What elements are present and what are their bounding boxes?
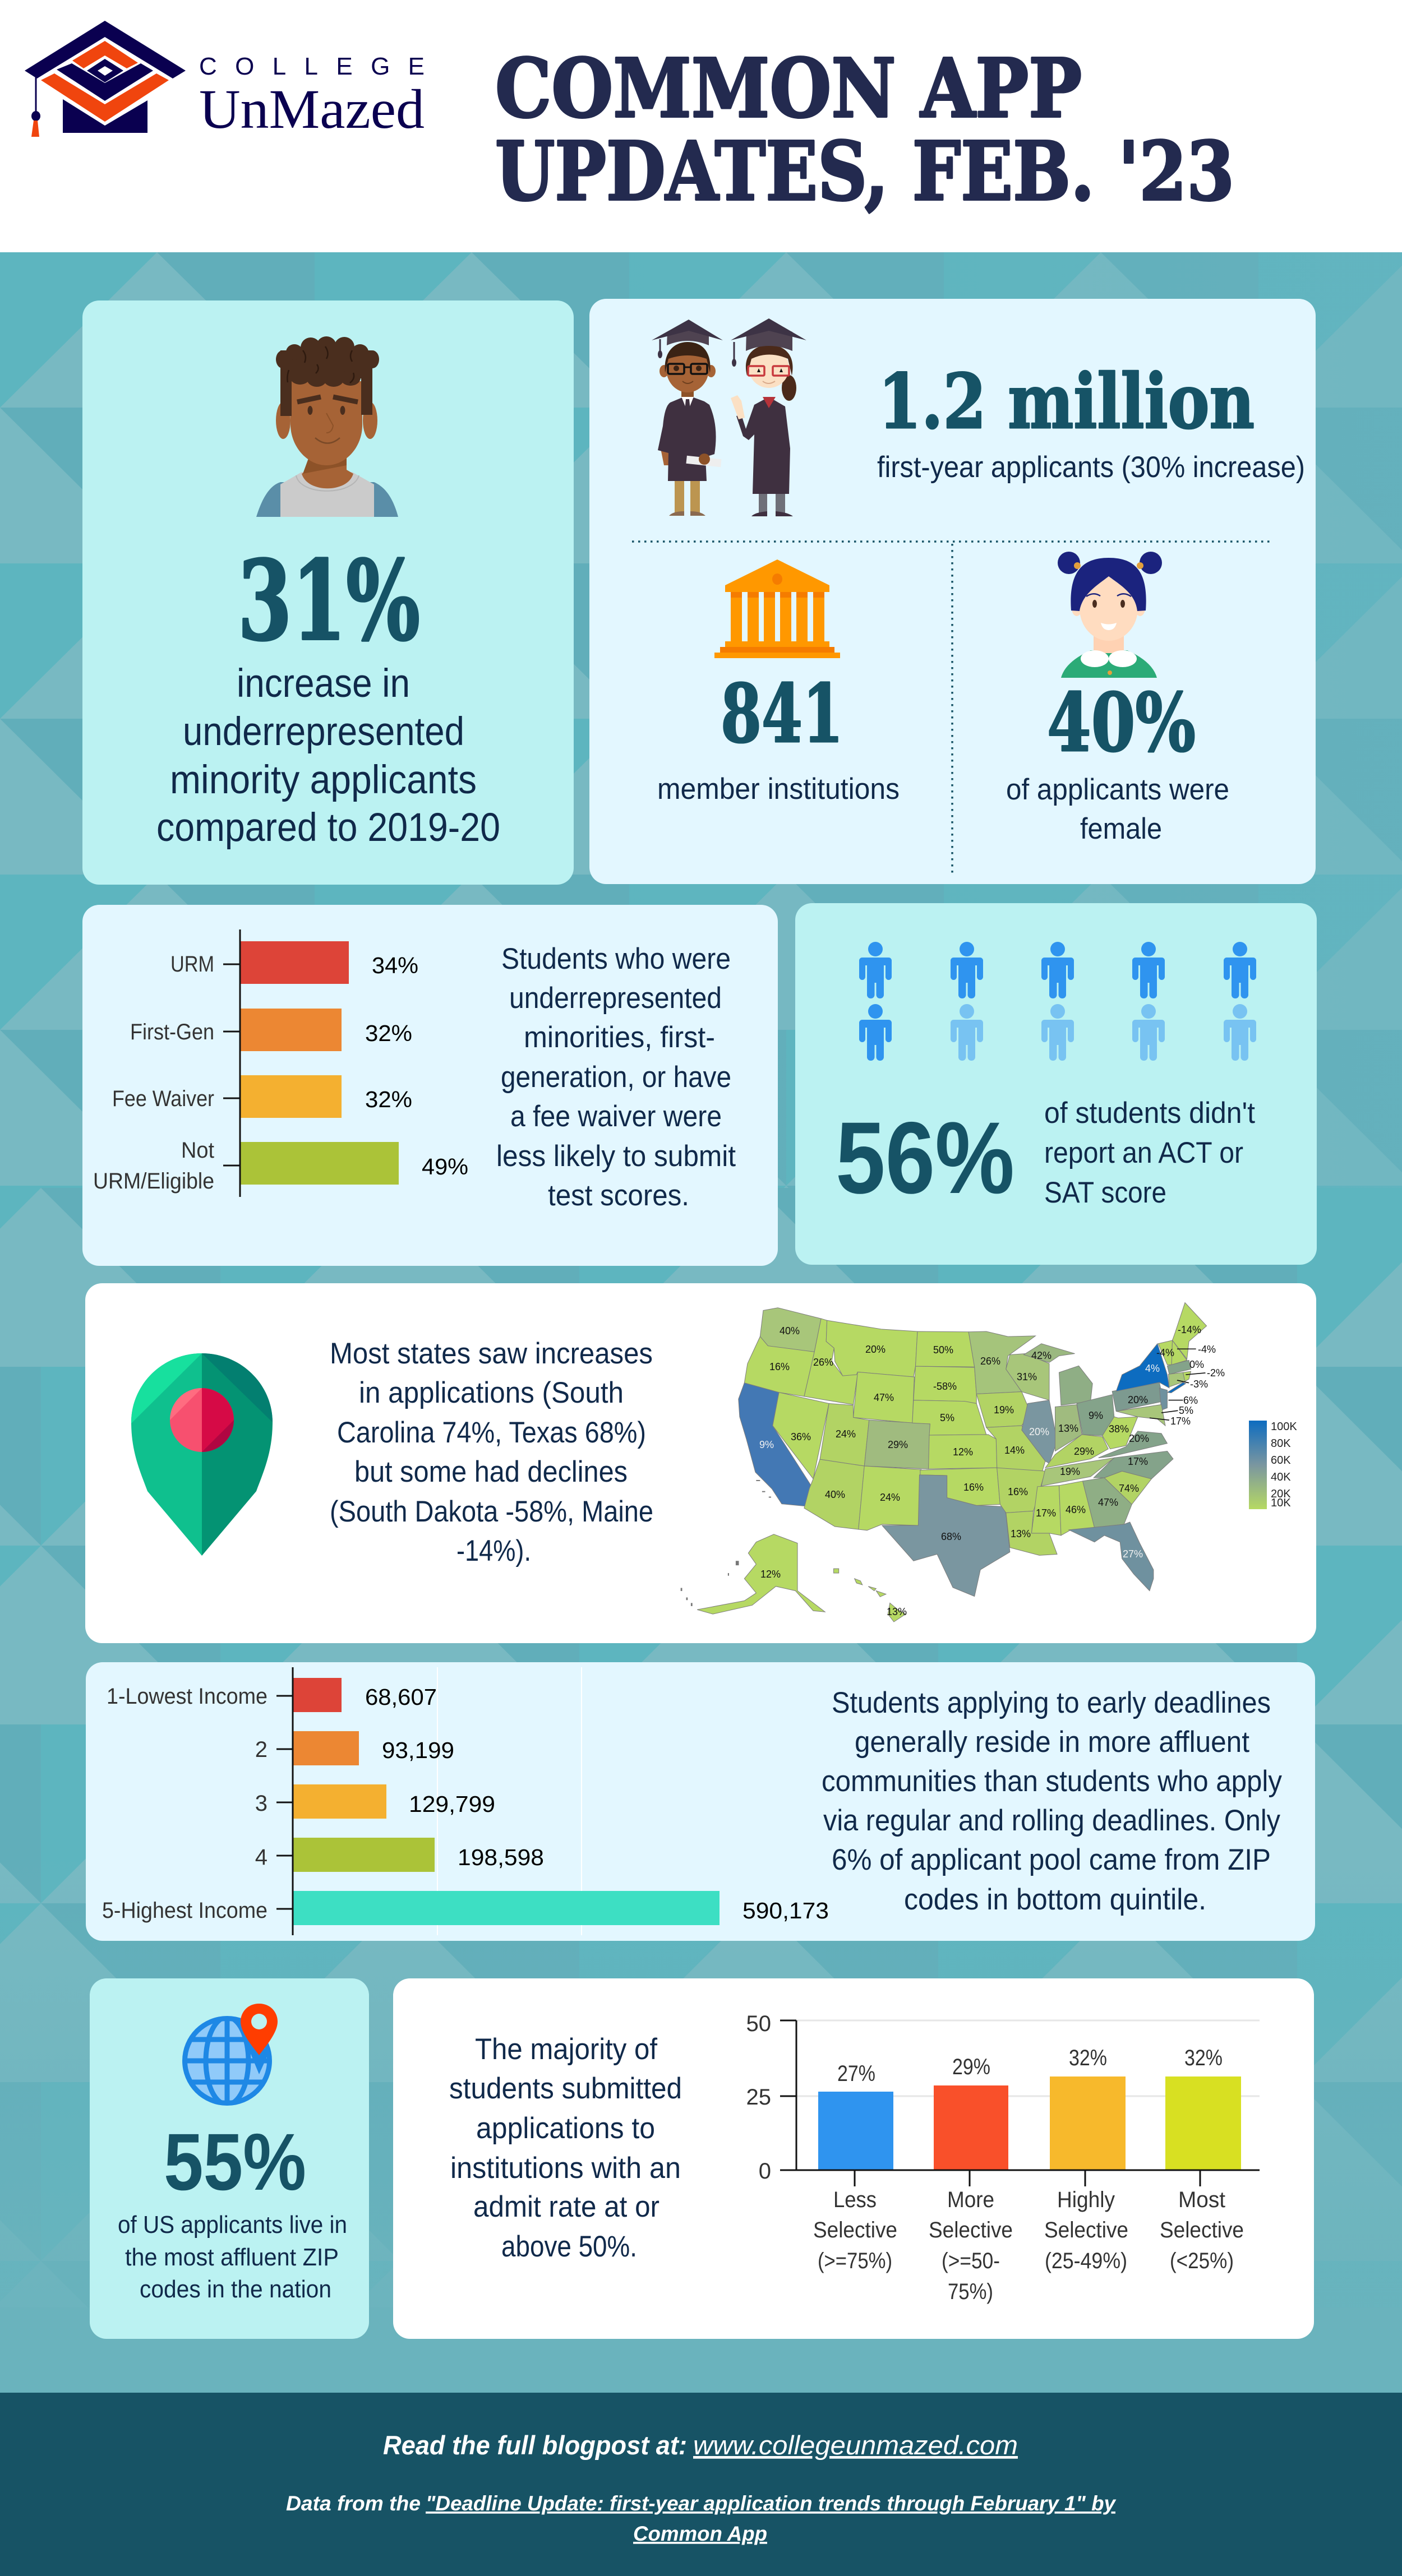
text: increase in underrepresented minority applicants: [156, 662, 500, 850]
bar chart: selectivity: Selective: [929, 2218, 1013, 2242]
panel: state map: [85, 1283, 1316, 1643]
bar chart: test score submission: URM: [170, 952, 214, 977]
bar chart: selectivity: Most: [1178, 2187, 1225, 2212]
woman graduate: [731, 318, 806, 516]
text: did not report ACT or SAT: report an ACT or: [1044, 1136, 1243, 1169]
state percent labels: 24%: [880, 1492, 900, 1503]
map legend: 80K: [1271, 1437, 1291, 1450]
stat: 1.2 million: 1.2 million: [878, 357, 1255, 446]
state percent labels: 12%: [953, 1446, 973, 1458]
bar chart: selectivity: 29%: [952, 2055, 990, 2079]
bar chart: selectivity: 25: [746, 2085, 771, 2110]
state percent labels: 9%: [1089, 1410, 1103, 1421]
bar chart: income quintiles: 1-Lowest Income: [107, 1684, 268, 1709]
text: majority at admit rate above 50%: [449, 2033, 682, 2263]
state percent labels: 47%: [874, 1392, 894, 1403]
logo word: College: COLLEGE: [199, 53, 425, 80]
text: data source: "Deadline Update: first-year application trends through February 1" by: [426, 2492, 1117, 2515]
state percent labels: 20%: [1129, 1433, 1149, 1444]
stat: 56%: 56%: [836, 1100, 1014, 1215]
text: early deadline applicants: codes in bottom quintile.: [904, 1883, 1206, 1916]
text: early deadline applicants: communities than students who apply: [822, 1765, 1282, 1798]
state percent labels: 36%: [791, 1431, 811, 1442]
bar chart: income quintiles: 5-Highest Income: [102, 1898, 268, 1923]
state percent labels: -58%: [933, 1381, 957, 1392]
text: read the full blogpost: Read the full blogpost at:: [383, 2430, 687, 2460]
text: increase in underrepresented minority applicants: underrepresented: [183, 710, 464, 754]
bar chart: selectivity: Less: [833, 2187, 877, 2212]
state percent labels: 16%: [1008, 1486, 1028, 1497]
state percent labels: 29%: [888, 1439, 908, 1450]
panel: 55% affluent ZIP codes: [90, 1978, 369, 2339]
panel: applicants, institutions, female: [589, 299, 1316, 884]
state percent labels: 24%: [836, 1428, 856, 1440]
panel: applicants by income quintile: [86, 1662, 1315, 1941]
state percent labels: 74%: [1119, 1483, 1139, 1494]
bar chart: test score submission: Not: [181, 1138, 214, 1163]
bar chart: income quintiles: 590,173: [742, 1898, 829, 1923]
text: less likely to submit test scores: generation, or have: [501, 1061, 731, 1094]
text: read the full blogpost: www.collegeunmazed.com: [693, 2430, 1018, 2460]
bar chart: test score submission: First-Gen: [130, 1020, 214, 1044]
title: [495, 41, 1234, 219]
state percent labels: 38%: [1109, 1423, 1129, 1435]
map legend: [1249, 1421, 1297, 1509]
state percent labels: 31%: [1017, 1371, 1037, 1382]
state percent labels: 68%: [941, 1531, 961, 1542]
bar chart: selectivity: Selective: [813, 2218, 897, 2242]
map legend: 60K: [1271, 1454, 1291, 1467]
text: applicants in affluent ZIP codes: the most affluent ZIP: [125, 2244, 339, 2271]
bar chart: income quintiles: 4: [255, 1845, 268, 1870]
state percent labels: 40%: [780, 1325, 800, 1336]
icon: girl portrait: [1058, 552, 1162, 678]
state percent labels: 19%: [1060, 1466, 1080, 1477]
text: less likely to submit test scores: minorities, first-: [524, 1021, 715, 1054]
text: state application changes: [330, 1337, 653, 1567]
state percent labels: 27%: [1123, 1548, 1143, 1560]
logo: College UnMazed: [25, 21, 425, 140]
text: did not report ACT or SAT: [1044, 1097, 1255, 1209]
state percent labels: 42%: [1031, 1350, 1052, 1361]
text: data source: Common App: [633, 2522, 767, 2545]
state percent labels: 12%: [760, 1569, 781, 1580]
state percent labels: -3%: [1190, 1379, 1208, 1390]
state percent labels: 26%: [813, 1357, 833, 1368]
bar chart: test score submission: URM/Eligible: [93, 1169, 214, 1194]
state percent labels: 16%: [769, 1361, 790, 1372]
text: member institutions: member institutions: [657, 773, 900, 806]
bar chart: income quintiles: 2: [255, 1737, 268, 1762]
chart: US map of applications by state: [681, 1303, 1297, 1622]
stat: 841: 841: [721, 667, 843, 761]
bar chart: selectivity: 32%: [1184, 2046, 1223, 2070]
text: increase in underrepresented minority applicants: compared to 2019-20: [156, 806, 500, 850]
text: of applicants were female: female: [1080, 812, 1162, 845]
state percent labels: 50%: [933, 1344, 953, 1356]
state percent labels: 0%: [1189, 1359, 1204, 1370]
text: increase in underrepresented minority applicants: minority applicants: [170, 758, 477, 802]
icon: graduates: [652, 318, 806, 516]
text: less likely to submit test scores: test scores.: [548, 1179, 689, 1212]
stat: 40%: 40%: [1047, 676, 1196, 770]
text: read the full blogpost: [383, 2430, 1018, 2460]
logo word: UnMazed: UnMazed: [199, 78, 425, 140]
text: did not report ACT or SAT: of students didn't: [1044, 1097, 1255, 1130]
bar chart: selectivity: [746, 2011, 1260, 2304]
bar chart: selectivity: More: [947, 2187, 994, 2212]
bar chart: income quintiles: 68,607: [365, 1684, 437, 1710]
text: less likely to submit test scores: underrepresented: [509, 982, 722, 1015]
map legend: 20K: [1271, 1488, 1291, 1500]
bar chart: income quintiles: [102, 1667, 829, 1935]
text: data source: Data from the: [286, 2492, 421, 2515]
state percent labels: 4%: [1145, 1363, 1160, 1374]
text: less likely to submit test scores: [496, 942, 736, 1212]
text: majority at admit rate above 50%: institutions with an: [450, 2152, 681, 2185]
state percent labels: 47%: [1098, 1497, 1118, 1508]
state percent labels: 17%: [1170, 1416, 1191, 1427]
text: increase in underrepresented minority applicants: increase in: [237, 662, 410, 706]
state percent labels: -14%: [1178, 1324, 1201, 1335]
bar chart: selectivity: Highly: [1057, 2187, 1115, 2212]
state percent labels: 20%: [1029, 1426, 1049, 1437]
icon: globe with location pin: [179, 2004, 278, 2108]
text: early deadline applicants: Students applying to early deadlines: [832, 1686, 1271, 1719]
state percent labels: 29%: [1074, 1446, 1094, 1457]
state percent labels: 5%: [1179, 1405, 1193, 1416]
title: UPDATES, FEB. '23: [495, 124, 1234, 219]
bar chart: selectivity: (25-49%): [1045, 2249, 1127, 2273]
bar chart: test score submission: [93, 929, 468, 1197]
state percent labels: 19%: [994, 1404, 1014, 1416]
text: less likely to submit test scores: a fee waiver were: [510, 1100, 722, 1133]
bar chart: test score submission: 32%: [365, 1020, 412, 1046]
state percent labels: 17%: [1036, 1507, 1056, 1519]
panel: test score submission by group: [82, 905, 778, 1266]
bar chart: selectivity: 27%: [837, 2061, 875, 2086]
text: majority at admit rate above 50%: The majority of: [475, 2033, 657, 2066]
text: of applicants were female: [1006, 773, 1229, 845]
icon: student portrait: [256, 336, 398, 517]
bar chart: test score submission: 34%: [372, 952, 418, 978]
text: applicants in affluent ZIP codes: of US applicants live in: [118, 2211, 347, 2239]
state percent labels: 40%: [825, 1489, 845, 1500]
text: applicants in affluent ZIP codes: codes in the nation: [140, 2276, 331, 2303]
state percent labels: 14%: [1004, 1445, 1025, 1456]
state percent labels: 9%: [759, 1439, 774, 1450]
text: state application changes: Carolina 74%, Texas 68%): [337, 1416, 646, 1449]
bar chart: selectivity: (>=50-: [942, 2249, 1000, 2273]
bar chart: selectivity: 0: [759, 2159, 771, 2184]
state percent labels: -4%: [1156, 1347, 1174, 1358]
state percent labels: 5%: [940, 1412, 954, 1423]
bar chart: selectivity: Selective: [1160, 2218, 1244, 2242]
text: majority at admit rate above 50%: applications to: [476, 2112, 655, 2145]
text: did not report ACT or SAT: SAT score: [1044, 1176, 1166, 1209]
state percent labels: 46%: [1066, 1504, 1086, 1515]
text: early deadline applicants: via regular and rolling deadlines. Only: [823, 1804, 1280, 1837]
state percent labels: -4%: [1198, 1344, 1216, 1355]
bar chart: income quintiles: 129,799: [409, 1791, 495, 1817]
bar chart: selectivity: Selective: [1044, 2218, 1128, 2242]
state percent labels: 20%: [865, 1344, 886, 1355]
text: state application changes: -14%).: [456, 1534, 531, 1567]
text: state application changes: in applications (South: [359, 1376, 624, 1409]
text: early deadline applicants: 6% of applicant pool came from ZIP: [832, 1843, 1271, 1876]
state percent labels: 17%: [1128, 1456, 1148, 1467]
text: applicants in affluent ZIP codes: [118, 2211, 347, 2303]
bar chart: income quintiles: 3: [255, 1791, 268, 1816]
map legend: 10K: [1271, 1497, 1291, 1509]
bar chart: selectivity: 50: [746, 2011, 771, 2036]
panel: applications by selectivity: [393, 1978, 1314, 2339]
title: COMMON APP: [495, 41, 1082, 136]
bar chart: selectivity: 32%: [1069, 2046, 1107, 2070]
icon: institution building: [714, 559, 840, 658]
state percent labels: -2%: [1207, 1367, 1225, 1379]
text: majority at admit rate above 50%: above 50%.: [501, 2230, 637, 2263]
text: data source: [286, 2492, 1117, 2545]
icon: map pin: [131, 1353, 273, 1556]
panel: 31% underrepresented minority applicants: [82, 300, 574, 885]
header band: [0, 0, 1402, 252]
text: early deadline applicants: [822, 1686, 1282, 1916]
text: less likely to submit test scores: Students who were: [501, 942, 731, 975]
text: state application changes: Most states saw increases: [330, 1337, 653, 1370]
bar chart: selectivity: (>=75%): [818, 2249, 892, 2273]
text: of applicants were female: of applicants were: [1006, 773, 1229, 806]
bar chart: test score submission: Fee Waiver: [112, 1086, 214, 1111]
text: majority at admit rate above 50%: admit rate at or: [473, 2190, 660, 2223]
bar chart: test score submission: 49%: [422, 1154, 468, 1180]
state percent labels: 13%: [887, 1606, 907, 1617]
stat: 55%: 55%: [164, 2117, 306, 2207]
state percent labels: 20%: [1128, 1394, 1148, 1405]
text: early deadline applicants: generally reside in more affluent: [855, 1726, 1249, 1759]
state percent labels: [759, 1324, 1225, 1617]
icon: people pictogram: [859, 942, 1256, 1061]
map legend: 100K: [1271, 1421, 1297, 1433]
text: first-year applicants: first-year applicants (30% increase): [877, 451, 1305, 484]
bar chart: income quintiles: 198,598: [458, 1844, 544, 1870]
map legend: 40K: [1271, 1471, 1291, 1483]
panel: 56% no test score: [795, 903, 1317, 1265]
icon: graduation cap maze: [25, 21, 186, 137]
bar chart: selectivity: (<25%): [1170, 2249, 1234, 2273]
footer: [0, 2393, 1402, 2576]
bar chart: selectivity: 75%): [948, 2279, 993, 2304]
bar chart: income quintiles: 93,199: [382, 1737, 454, 1763]
state percent labels: 6%: [1183, 1395, 1198, 1406]
text: state application changes: (South Dakota -58%, Maine: [330, 1495, 653, 1528]
text: less likely to submit test scores: less likely to submit: [496, 1140, 736, 1173]
state percent labels: 13%: [1058, 1423, 1078, 1434]
state percent labels: 16%: [963, 1482, 984, 1493]
state percent labels: 13%: [1011, 1528, 1031, 1539]
text: state application changes: but some had declines: [354, 1455, 628, 1488]
bar chart: test score submission: 32%: [365, 1086, 412, 1112]
man graduate: [652, 320, 723, 516]
text: majority at admit rate above 50%: students submitted: [449, 2072, 682, 2105]
state percent labels: 26%: [980, 1356, 1000, 1367]
stat: 31%: 31%: [238, 537, 420, 665]
